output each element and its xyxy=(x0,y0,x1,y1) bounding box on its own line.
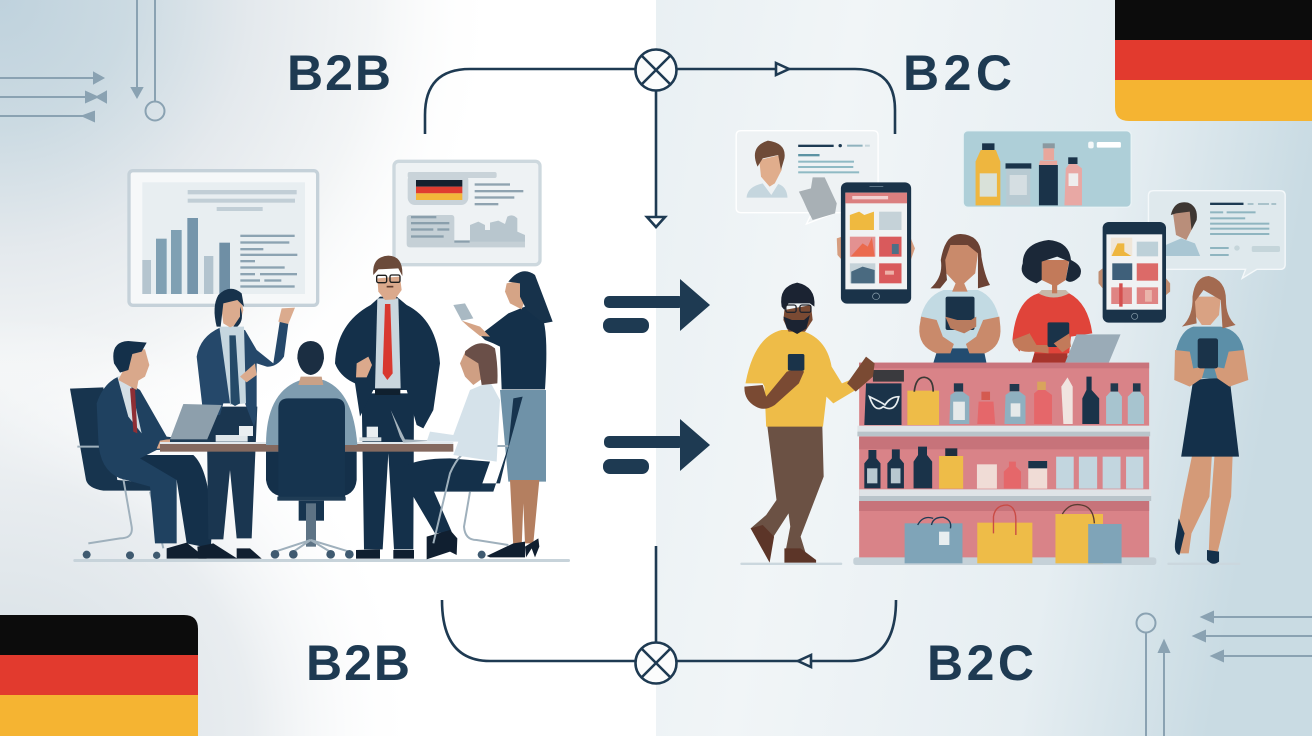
profile card on the right xyxy=(1148,191,1285,278)
person: woman in red top xyxy=(1012,240,1092,363)
panel: B2B meeting scene xyxy=(70,161,570,562)
profile card with avatar xyxy=(736,131,878,224)
arrow: lower transition xyxy=(603,419,710,474)
presentation board with bar chart xyxy=(129,171,318,305)
person: seated woman with laptop xyxy=(391,343,523,559)
laptop: seated man xyxy=(170,404,222,442)
floor shadows xyxy=(740,563,1240,565)
lower shelf products xyxy=(864,447,1143,489)
laptop: counter xyxy=(1065,334,1121,363)
arrow: upper transition xyxy=(603,279,710,333)
heading: B2B top: B2B xyxy=(287,45,393,101)
info board with German flag xyxy=(394,161,540,265)
person: man seen from behind in chair xyxy=(266,341,357,559)
shopping bags xyxy=(905,505,1122,563)
shop shelf counter xyxy=(853,363,1156,565)
flag: top right xyxy=(1115,0,1312,121)
person: man in yellow sweater xyxy=(744,283,875,563)
decoration: bottom-right circuit lines xyxy=(1136,612,1312,736)
heading: B2C top: B2C xyxy=(903,45,1017,101)
floor shadow xyxy=(73,559,570,562)
top shelf products xyxy=(864,370,1144,425)
heading: B2B bottom: B2B xyxy=(306,635,412,691)
person: standing woman with tablet xyxy=(453,271,553,557)
tablet: right shop screen xyxy=(1099,222,1170,323)
conference table xyxy=(160,426,453,452)
background: left half xyxy=(0,0,656,736)
connector: bottom loop xyxy=(442,546,896,684)
panel: B2C retail scene xyxy=(736,131,1285,565)
person: presenting woman xyxy=(197,289,295,559)
heading: B2C bottom: B2C xyxy=(927,635,1038,691)
person: woman with phone on the right xyxy=(1174,276,1248,564)
tablet: left shop screen xyxy=(837,182,915,304)
product card with bottles xyxy=(963,131,1131,207)
connector: top loop xyxy=(425,50,895,227)
background: right half xyxy=(656,0,1312,736)
person: woman in light blue tee xyxy=(919,234,1001,363)
person: standing man with red tie xyxy=(335,256,440,559)
decoration: top-left circuit lines xyxy=(0,0,164,121)
flag: bottom left xyxy=(0,615,198,736)
person: seated man with laptop xyxy=(70,341,237,559)
